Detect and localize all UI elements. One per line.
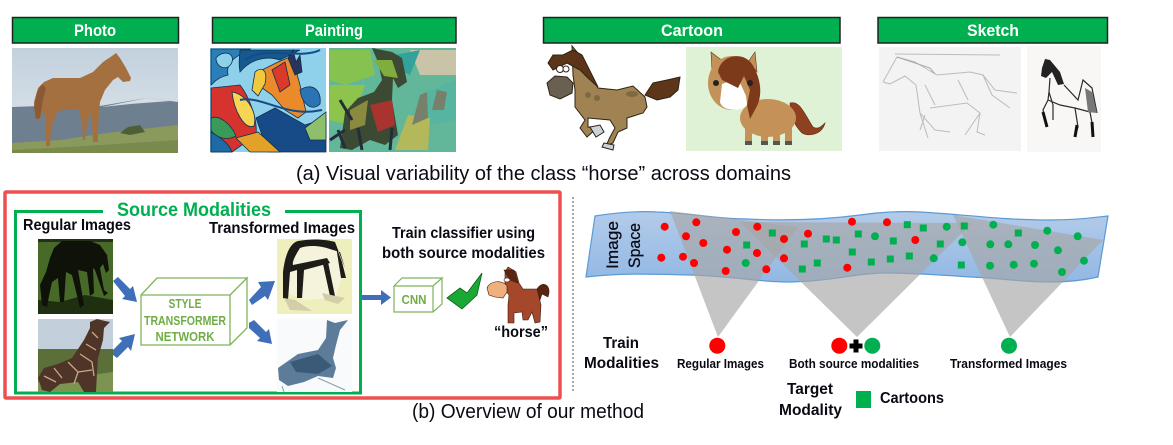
arrow: transformer to stylised horse: [249, 281, 275, 305]
header: Sketch: [878, 18, 1108, 43]
points: target cartoons: [743, 221, 1022, 272]
label: Regular Images: Regular Images: [23, 217, 131, 234]
marker: transformed images: [950, 338, 1067, 371]
block: CNN: CNN: [402, 292, 426, 307]
legend: target modality: Modality: [779, 402, 842, 419]
label: Train Modalities: Modalities: [584, 355, 659, 372]
header: Photo: [12, 18, 178, 43]
band: image space: [586, 212, 1108, 282]
label: Train Modalities: [584, 335, 659, 372]
image: cute cartoon pony on pale green: [686, 47, 842, 151]
icon: green check mark: [447, 273, 482, 309]
header: Cartoon: [544, 18, 840, 43]
legend: train modalities: [584, 335, 1067, 372]
label: Image Space: Space: [625, 223, 644, 268]
panel: source modalities (green frame): [16, 200, 360, 393]
header: Painting: [212, 18, 456, 43]
image: pencil sketch of running horse: [879, 47, 1021, 151]
legend: target modality: Cartoons: [880, 390, 944, 407]
legend: target modality: [779, 381, 944, 419]
image: expressive horse painting: [329, 48, 456, 152]
icon: cartoon brown horse: [487, 267, 549, 323]
image: galloping cartoon horse: [547, 46, 680, 150]
label: Train Modalities: Train: [603, 335, 639, 352]
image: photo of a horse on a hill: [12, 48, 178, 153]
arrow: horse to transformer: [113, 277, 137, 302]
points: regular images: [657, 218, 919, 275]
image: giraffe in grass: [38, 319, 113, 392]
projection cones: [670, 211, 1103, 337]
marker: regular images: Regular Images: [677, 356, 764, 371]
header: Sketch: Sketch: [967, 21, 1019, 40]
marker: both source modalities: Both source modalities: [789, 356, 919, 371]
text: train classifier: Train classifier using: [392, 225, 535, 242]
block: style transformer network: STYLE: [168, 296, 202, 311]
panel: domain examples: [12, 18, 1108, 153]
legend: target modality: Target: [787, 381, 834, 398]
panel: overview of method (red frame): [5, 192, 560, 398]
points: transformed images: [742, 221, 1088, 276]
chart: image space diagram: [586, 211, 1108, 337]
image: stylised horse: [277, 239, 352, 314]
caption (a): (a) Visual variability of the class “horse” across domains: [296, 163, 791, 185]
image: dark horse grazing: [38, 239, 113, 314]
caption (b): (b) Overview of our method: [412, 401, 644, 423]
header: Cartoon: Cartoon: [661, 21, 723, 40]
image: stylised giraffe: [277, 319, 352, 392]
header: Painting: Painting: [305, 21, 363, 40]
block: style transformer network: [141, 278, 247, 345]
label: Transformed Images: Transformed Images: [209, 220, 355, 237]
text: train classifier: [382, 225, 545, 262]
marker: regular images: [677, 338, 764, 371]
heading: Source Modalities: Source Modalities: [117, 200, 271, 221]
image: stylised colourful horse painting: [210, 48, 326, 152]
block: style transformer network: TRANSFORMER: [144, 313, 226, 328]
label: Image Space: Image: [603, 221, 622, 269]
marker: both source modalities: [789, 338, 919, 371]
arrow: to CNN: [362, 290, 391, 305]
divider between panels: [572, 197, 574, 393]
arrow: giraffe to transformer: [113, 334, 135, 358]
marker: transformed images: Transformed Images: [950, 356, 1067, 371]
image: ink sketch of rearing horse: [1027, 46, 1101, 152]
block: CNN: [394, 278, 442, 312]
block: style transformer network: NETWORK: [156, 329, 215, 344]
arrow: transformer to stylised giraffe: [249, 320, 272, 344]
label: Image Space: [603, 221, 644, 269]
label: "horse": “horse”: [494, 324, 548, 341]
header: Photo: Photo: [74, 21, 116, 40]
text: train classifier: both source modalities: [382, 245, 545, 262]
